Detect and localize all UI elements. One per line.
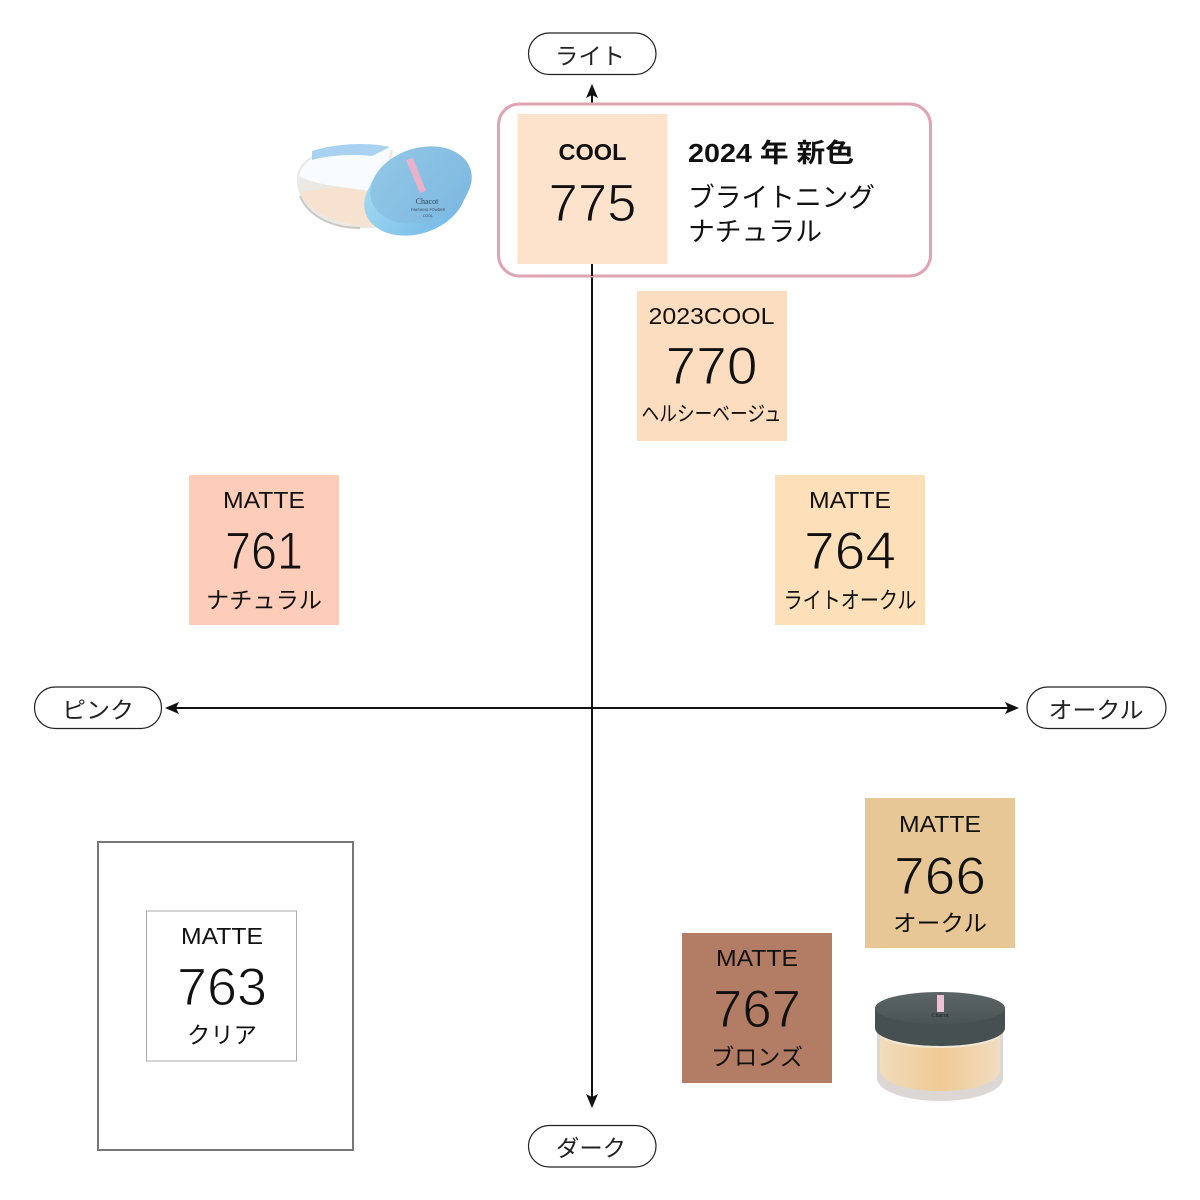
icon: powder jar product xyxy=(875,992,1005,1101)
swatch: 763: 763 xyxy=(177,958,267,1017)
panel: 2024 new colour highlight xyxy=(498,104,930,276)
swatch: 761: MATTE xyxy=(223,487,305,513)
new colour description: ブライトニング xyxy=(688,183,875,213)
swatch: 767: MATTE xyxy=(716,945,798,971)
axis label: pink: ピンク xyxy=(62,697,134,723)
icon: blue compact powder product: FINISHING POWDER xyxy=(411,208,446,212)
swatch: 770 xyxy=(637,291,787,441)
swatch: 767: ブロンズ xyxy=(711,1044,803,1070)
swatch: 775: COOL xyxy=(558,139,626,165)
swatch: 767 xyxy=(682,933,832,1083)
axis label: light xyxy=(528,33,656,74)
swatch: 761: 761 xyxy=(225,522,303,581)
swatch: 770: ヘルシーベージュ xyxy=(642,403,782,426)
swatch: 766 xyxy=(865,798,1015,948)
swatch: 775 xyxy=(518,114,668,264)
panel: clear powder frame xyxy=(98,842,353,1150)
swatch: 770: 2023COOL xyxy=(648,303,775,329)
axis label: dark xyxy=(528,1126,656,1167)
axis label: pink xyxy=(34,687,162,728)
swatch: 764 xyxy=(775,475,925,625)
swatch: 766: オークル xyxy=(893,910,987,936)
swatch: 766: MATTE xyxy=(899,811,981,837)
swatch: 770: 770 xyxy=(666,337,758,396)
icon: blue compact powder product xyxy=(297,134,482,248)
new colour description: ナチュラル xyxy=(688,217,822,247)
horizontal axis arrow xyxy=(165,702,1019,714)
swatch: 763 xyxy=(146,911,296,1061)
axis label: dark: ダーク xyxy=(556,1135,626,1161)
swatch: 764: MATTE xyxy=(809,487,891,513)
axis label: light: ライト xyxy=(555,43,625,69)
swatch: 761 xyxy=(189,475,339,625)
swatch: 761: ナチュラル xyxy=(206,587,322,613)
swatch: 764: 764 xyxy=(804,522,896,581)
swatch: 775: 775 xyxy=(548,174,636,233)
swatch: 763: MATTE xyxy=(181,923,263,949)
new colour description xyxy=(688,138,875,247)
icon: blue compact powder product: COOL xyxy=(423,214,433,218)
swatch: 763: クリア xyxy=(187,1022,257,1048)
new colour description: 2024 年 新色 xyxy=(688,138,854,168)
vertical axis arrow xyxy=(586,84,598,1108)
swatch: 766: 766 xyxy=(894,847,986,906)
swatch: 764: ライトオークル xyxy=(784,587,916,613)
icon: blue compact powder product: Chacot xyxy=(416,197,439,206)
axis label: ochre: オークル xyxy=(1048,697,1144,723)
vertical axis continuation under highlight xyxy=(591,264,593,276)
swatch: 767: 767 xyxy=(713,980,801,1039)
icon: powder jar product: Chacot xyxy=(932,1013,949,1019)
axis label: ochre xyxy=(1027,687,1166,728)
